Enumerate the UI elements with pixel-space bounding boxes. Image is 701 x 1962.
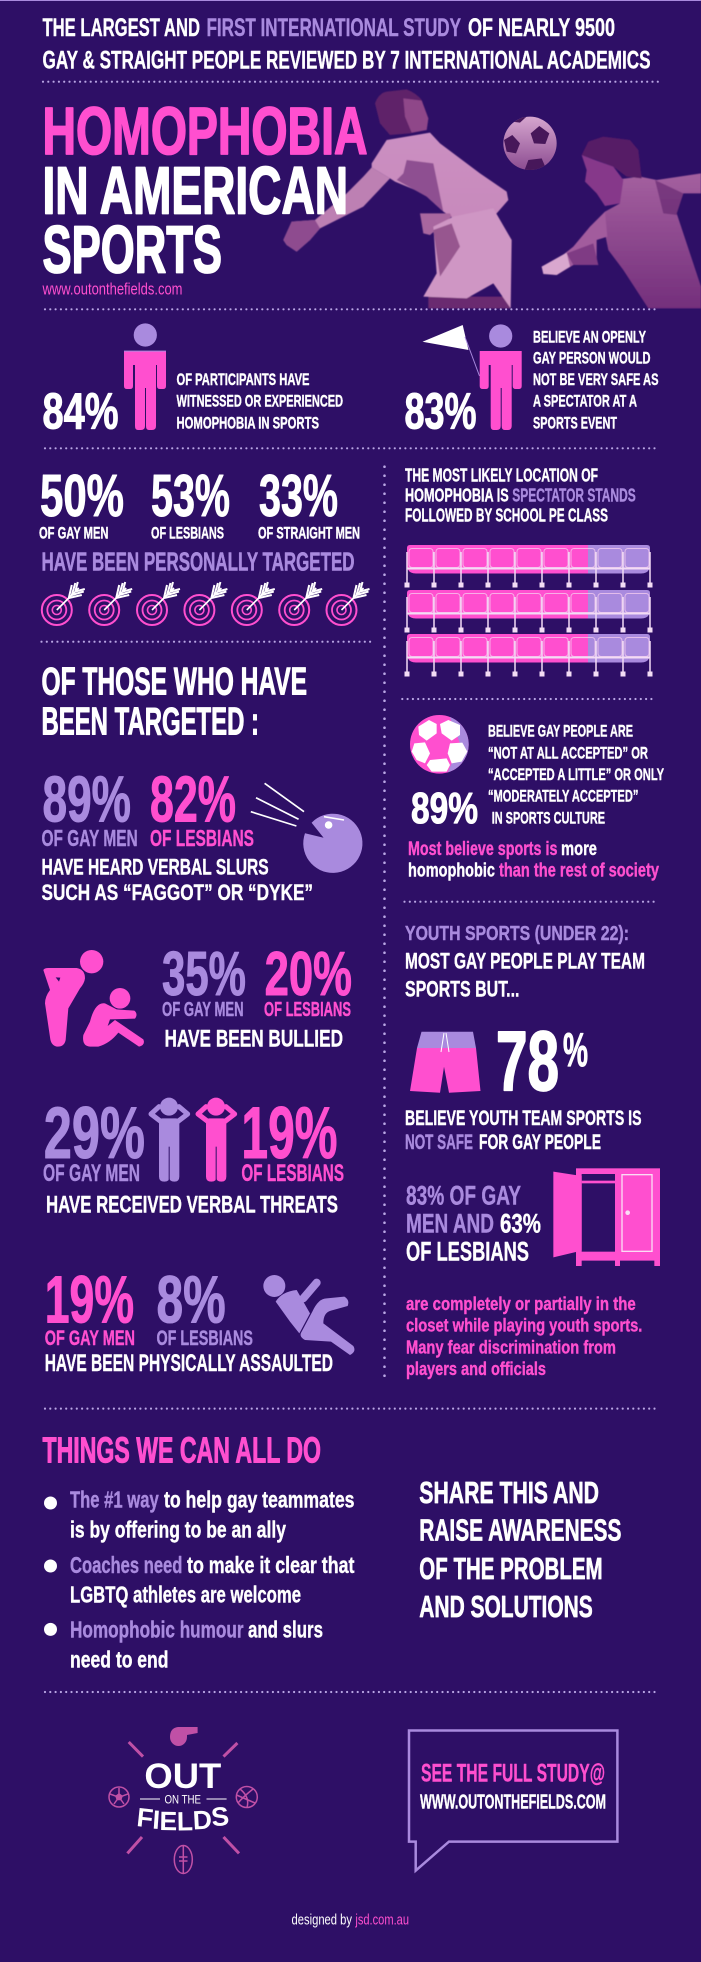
text: more homophobic [408,839,659,882]
panel: verbal slurs: 82% [150,763,236,836]
stat: 83% spectator safety: SPORTS EVENT [533,414,617,432]
footer credit: designed by [292,1911,352,1928]
text: in the closet: Many fear discrimination from [406,1337,616,1357]
panel: verbal threats: HAVE RECEIVED VERBAL THREATS [46,1192,338,1219]
icon: closet [553,1168,660,1266]
bullet: the #1 way: to help gay teammates [164,1486,354,1512]
text: in the closet: are completely or partially in the [406,1294,636,1314]
panel: verbal threats: OF LESBIANS [241,1160,344,1187]
panel: verbal slurs: OF LESBIANS [150,825,254,851]
subheading: HAVE BEEN PERSONALLY TARGETED [42,546,354,576]
icon: shorts [410,1032,480,1093]
panel: things we can all do [42,1430,355,1673]
soccer ball [503,115,557,173]
callout: share this [419,1475,621,1624]
heading: study intro [42,14,650,74]
text: closet stat: MEN AND [406,1208,494,1238]
stat: 83% spectator safety: 83% [404,382,476,439]
panel: verbal threats: OF GAY MEN [43,1160,140,1187]
footer credit: jsd.com.au [355,1911,409,1928]
bullet: homophobic humour [44,1617,323,1673]
panel: bullied [43,940,352,1053]
title [42,94,368,299]
panel: verbal slurs: OF GAY MEN [42,825,138,851]
bullet: coaches: to make it clear that [187,1552,355,1578]
stat: 84% witnessed homophobia: HOMOPHOBIA IN SPORTS [176,414,319,432]
panel: bullied: OF LESBIANS [264,999,351,1021]
icons: row of targets [42,582,370,625]
panel: verbal slurs: SUCH AS “FAGGOT” OR “DYKE” [42,880,313,905]
logo wordmark: OUT [144,1757,221,1796]
percentages: OF STRAIGHT MEN [258,524,360,543]
text: closet stat: OF LESBIANS [406,1237,529,1267]
panel: verbal threats: 29% [44,1093,145,1174]
callout: share this: SHARE THIS AND [419,1475,599,1510]
panel: youth sports: FOR GAY PEOPLE [479,1131,601,1154]
icon: stadium seats [404,545,652,676]
callout: see the full study [409,1730,617,1871]
panel: verbal slurs: 89% [42,763,131,836]
panel: physically assaulted: 8% [156,1262,226,1337]
heading: youth sports [405,923,645,1002]
text: more homophobic: Most believe sports is [408,839,557,860]
panel: verbal threats [43,1093,344,1219]
panel: personally targeted [39,463,370,625]
panel: acceptance in sports culture [408,713,664,882]
stat: 84% witnessed homophobia [42,323,343,439]
bullet: homophobic humour: Homophobic humour [70,1617,244,1643]
title: HOMOPHOBIA [42,94,368,169]
title: IN AMERICAN [42,153,348,228]
panel: youth sports: NOT SAFE [405,1131,473,1154]
heading: of those targeted: BEEN TARGETED : [42,700,259,743]
footer credit [292,1911,409,1928]
heading: study intro: FIRST INTERNATIONAL STUDY [206,14,461,42]
icon: whistle [170,1727,198,1746]
panel: acceptance in sports culture: 89% [411,784,478,833]
woman shouting [542,137,701,308]
heading: study intro: OF NEARLY 9500 [468,14,615,42]
logo wordmark: ON THE [164,1795,201,1807]
heading: of those targeted [42,660,307,743]
icon: bully and victim [43,950,144,1047]
text: location: SPECTATOR STANDS [512,485,636,506]
text: location [405,465,636,526]
text: closet stat [406,1180,541,1267]
text: location: HOMOPHOBIA IS [405,485,509,506]
icon: falling figure [263,1275,354,1355]
heading: of those targeted: OF THOSE WHO HAVE [42,660,307,703]
rays [127,1742,239,1853]
icon: person [124,323,166,430]
stat: 84% witnessed homophobia: WITNESSED OR EXPERIENCED [176,393,343,411]
percentages: OF LESBIANS [151,524,224,543]
panel: verbal slurs [42,763,362,905]
panel: physically assaulted: 19% [45,1262,134,1337]
icon: shouting face [251,783,362,873]
panel: acceptance in sports culture: IN SPORTS CULTURE [492,808,605,827]
man heading ball [283,89,512,308]
stat: 84% witnessed homophobia: 84% [42,382,118,439]
icon: soccer ball [109,1787,129,1807]
text: in the closet: players and officials [406,1359,546,1379]
logo wordmark [135,1757,231,1836]
stat: 83% spectator safety [404,324,658,439]
bullet: the #1 way [44,1486,354,1542]
panel: bullied: 35% [162,940,246,1009]
icons: figures holding head [151,1098,235,1182]
bullet: homophobic humour: and slurs [248,1617,323,1643]
text: in the closet: closet while playing youth sports. [406,1316,642,1336]
text: closet stat: 63% [500,1208,541,1238]
bullet: coaches: Coaches need [70,1552,182,1578]
percentages: 53% [151,463,230,529]
title: SPORTS [42,213,222,288]
panel: most likely location [404,465,652,676]
text: more homophobic: homophobic [408,861,495,882]
icon: basketball [236,1786,257,1808]
panel: bullied: 20% [265,940,352,1009]
panel: bullied: OF GAY MEN [162,999,244,1021]
heading: youth sports: YOUTH SPORTS (UNDER 22): [405,923,629,945]
stat: 84% witnessed homophobia: OF PARTICIPANTS HAVE [176,371,310,389]
panel: physically assaulted: HAVE BEEN PHYSICALLY ASSAULTED [45,1350,333,1377]
bullet: coaches [44,1552,355,1608]
logo wordmark: FIELDS [135,1801,231,1836]
logo: out on the fields [109,1727,257,1874]
bullet: coaches: LGBTQ athletes are welcome [70,1582,301,1608]
bullet: the #1 way: is by offering to be an ally [70,1516,286,1542]
text: in the closet [406,1294,642,1379]
panel: verbal slurs: HAVE HEARD VERBAL SLURS [42,854,269,879]
illustration: soccer players and ball [283,89,701,308]
text: more homophobic: than the rest of society [499,861,659,882]
stat: 83% spectator safety: A SPECTATOR AT A [533,393,637,411]
percentages: 33% [259,463,338,529]
percentages [39,463,360,543]
heading: youth sports: SPORTS BUT... [405,977,520,1002]
icon: person with flag [422,324,522,430]
panel: physically assaulted [45,1262,354,1377]
callout: share this: AND SOLUTIONS [419,1589,593,1624]
panel: verbal threats: 19% [241,1093,338,1174]
text: more homophobic: more [561,839,597,860]
panel: physically assaulted: OF LESBIANS [156,1327,253,1350]
percentages: OF GAY MEN [39,524,108,543]
percentages: 50% [40,463,124,529]
bullet: the #1 way: The #1 way [70,1486,159,1512]
stat: 78%: 78 [496,1014,559,1108]
icon: pink soccer ball [410,713,472,775]
title: www.outonthefields.com [42,280,182,299]
icon: rugby ball [174,1846,192,1874]
panel: youth sports [405,923,660,1379]
panel: things we can all do: THINGS WE CAN ALL DO [42,1430,321,1471]
heading: study intro: THE LARGEST AND [42,14,200,42]
bullet: homophobic humour: need to end [70,1647,168,1673]
panel: bullied: HAVE BEEN BULLIED [164,1026,343,1053]
text: location: THE MOST LIKELY LOCATION OF [405,465,598,486]
speech bubble [409,1730,617,1871]
text: closet stat: 83% OF GAY [406,1180,521,1210]
stat: 78%: % [563,1023,588,1076]
callout: share this: OF THE PROBLEM [419,1551,603,1586]
panel: physically assaulted: OF GAY MEN [45,1327,135,1350]
stat: 83% spectator safety: BELIEVE AN OPENLY [533,328,646,346]
